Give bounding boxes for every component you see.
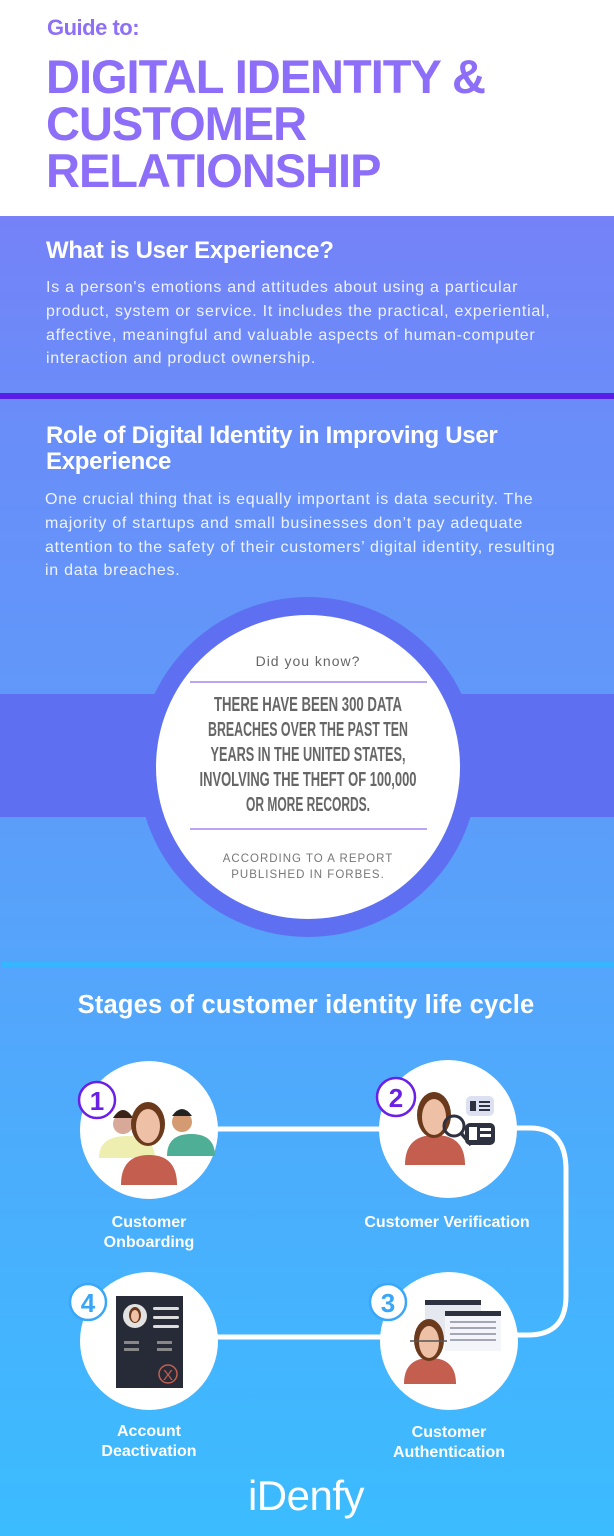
heading: role: [46, 422, 498, 475]
badge 4: 4: [81, 1288, 96, 1318]
badge 4: [70, 1284, 106, 1320]
logo: iDenfy: iDenfy: [248, 1472, 365, 1519]
title: DIGITAL IDENTITY &: [46, 50, 485, 103]
labels: Customer Verification: [364, 1214, 530, 1231]
text: UX definition: affective, meaningful and valuable aspects of human-computer: [46, 327, 535, 344]
callout: did you know: Did you know?: [256, 653, 360, 669]
badge 1: 1: [90, 1086, 104, 1116]
badge 2: 2: [389, 1083, 403, 1113]
header: guide to: Guide to:: [47, 15, 139, 40]
panel: role of digital identity: [0, 399, 614, 1536]
connector lines: [215, 1128, 566, 1337]
text: UX definition: interaction and product ownership.: [46, 350, 316, 367]
text: role description: in data breaches.: [45, 562, 180, 579]
band behind circle: [0, 694, 614, 817]
callout: did you know: [138, 597, 478, 937]
labels: Customer: [112, 1214, 186, 1231]
text: UX definition: product, system or service. It includes the practical, experiential,: [46, 303, 551, 320]
text: UX definition: [46, 279, 551, 367]
text: role description: majority of startups and small businesses don’t pay adequate: [45, 515, 523, 532]
callout: did you know: OR MORE RECORDS.: [246, 794, 370, 816]
heading: role: Role of Digital Identity in Improving User: [46, 422, 497, 449]
labels: Customer: [412, 1424, 486, 1441]
callout: did you know: YEARS IN THE UNITED STATES,: [210, 744, 406, 766]
badge 3: 3: [381, 1288, 395, 1318]
heading: stages: Stages of customer identity life cycle: [78, 991, 534, 1019]
text: role description: [45, 491, 555, 579]
callout: did you know: THERE HAVE BEEN 300 DATA: [214, 694, 402, 716]
callout: did you know: ACCORDING TO A REPORT: [223, 853, 393, 865]
heading: what is UX: What is User Experience?: [46, 237, 334, 264]
labels: Authentication: [393, 1444, 505, 1461]
labels: [101, 1214, 530, 1461]
title: RELATIONSHIP: [46, 144, 380, 197]
callout: did you know: BREACHES OVER THE PAST TEN: [208, 719, 408, 741]
stage 4: account deactivation: [70, 1272, 218, 1410]
stage 1: customer onboarding: [79, 1061, 218, 1199]
callout: did you know: PUBLISHED IN FORBES.: [231, 869, 385, 881]
text: UX definition: Is a person's emotions and attitudes about using a particular: [46, 279, 518, 296]
stage 2: customer verification: [377, 1060, 517, 1198]
stage 4: account deactivation: X: [163, 1367, 173, 1384]
labels: Onboarding: [104, 1234, 194, 1251]
labels: Account: [117, 1423, 182, 1440]
text: role description: One crucial thing that is equally important is data security. The: [45, 491, 533, 508]
badge 3: [370, 1284, 406, 1320]
labels: Deactivation: [101, 1443, 197, 1460]
panel: what is UX: [0, 216, 614, 393]
title: [46, 50, 485, 197]
callout: did you know: INVOLVING THE THEFT OF 100,000: [200, 769, 416, 791]
heading: role: Experience: [46, 448, 171, 475]
text: role description: attention to the safety of their customers’ digital identity, resulting: [45, 539, 555, 556]
stage 3: customer authentication: [370, 1272, 518, 1410]
title: CUSTOMER: [46, 97, 306, 150]
